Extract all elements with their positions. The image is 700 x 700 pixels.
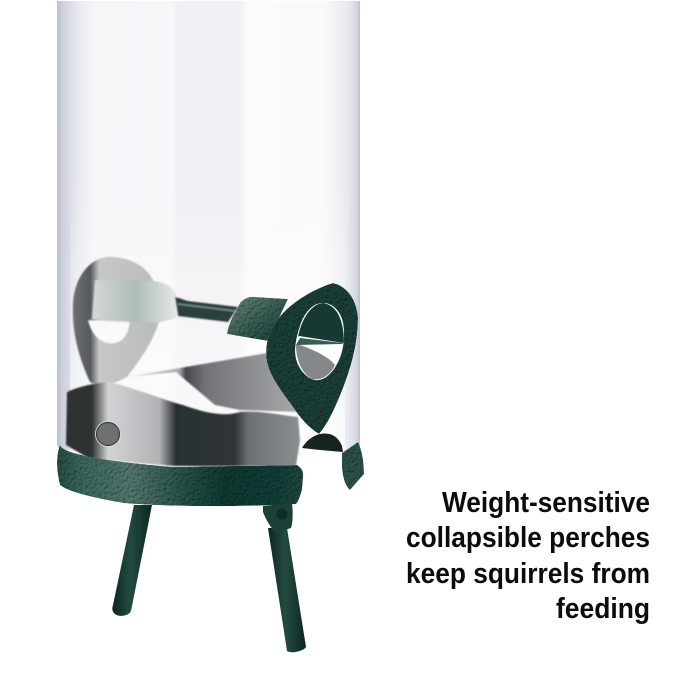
front perch ring	[266, 283, 358, 434]
clear acrylic tube	[57, 1, 360, 456]
leg hinge bracket	[263, 503, 293, 533]
caption: collapsible perches	[406, 522, 650, 554]
back perch ring	[73, 257, 160, 385]
front perch collar	[227, 297, 288, 341]
feeding port opening	[298, 434, 345, 466]
back perch collar	[92, 280, 178, 323]
view through perch hole	[290, 299, 350, 385]
drain button	[95, 421, 121, 447]
caption: feeding	[556, 593, 650, 625]
perch rod	[175, 297, 238, 322]
caption	[406, 487, 650, 625]
right base tab	[342, 442, 364, 490]
inner seed dish	[66, 382, 300, 466]
inner seed dome	[127, 352, 300, 412]
right leg	[268, 528, 306, 652]
metal base ring	[57, 445, 303, 506]
tube lower highlight	[70, 180, 345, 450]
left leg	[112, 505, 152, 616]
back perch seen through tube	[73, 257, 238, 385]
caption: Weight-sensitive	[442, 487, 650, 519]
caption: keep squirrels from	[406, 558, 650, 590]
